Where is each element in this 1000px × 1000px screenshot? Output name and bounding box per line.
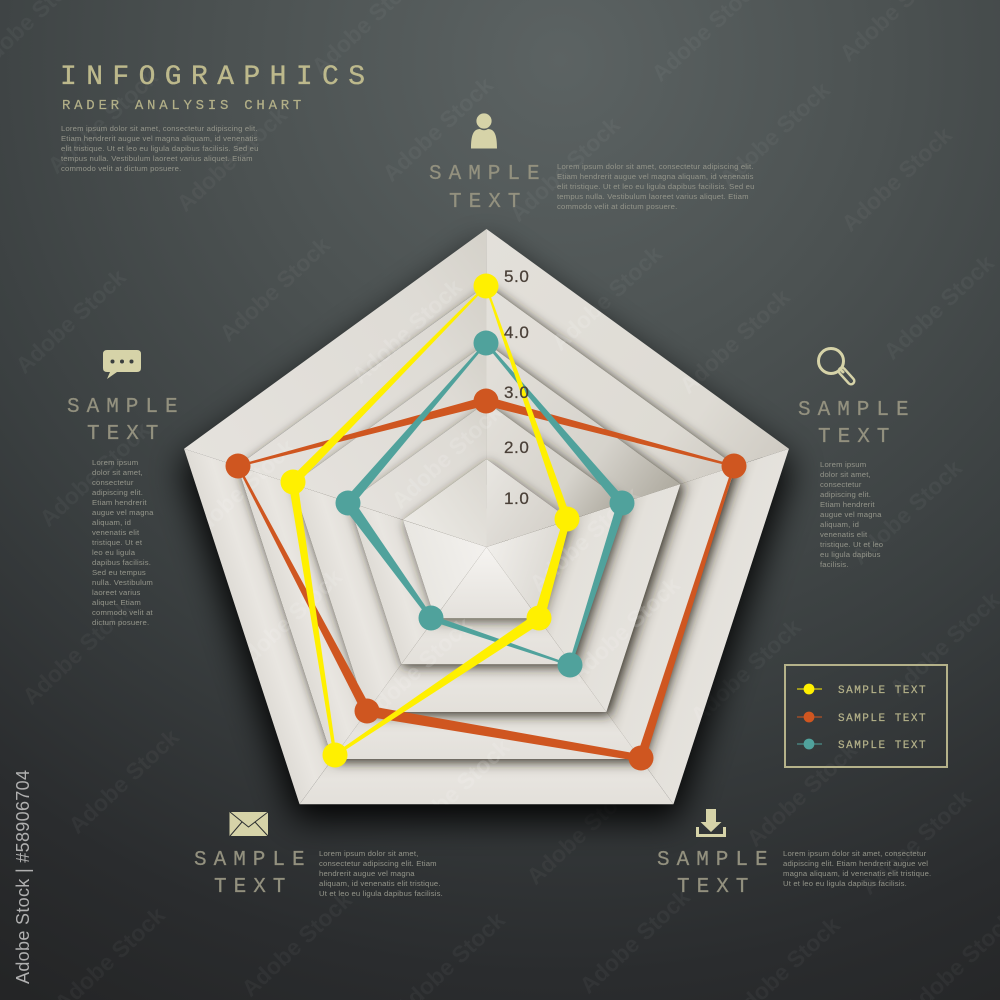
watermark on background: Adobe Stock [846, 455, 967, 570]
icon: download [696, 809, 726, 837]
top label [429, 163, 547, 214]
left text block: laoreet varius [92, 588, 141, 597]
left text block: aliquet. Etiam [92, 598, 141, 607]
watermark on paper: Adobe Stock [394, 734, 515, 849]
bottom left text block: aliquam, id venenatis elit tristique. [319, 879, 441, 888]
left text block: dolor sit amet, [92, 468, 143, 477]
legend row yellow: SAMPLE TEXT [838, 685, 927, 697]
left text block: dapibus facilisis. [92, 558, 151, 567]
right text block: augue vel magna [820, 510, 882, 519]
right text block: tristique. Ut et leo [820, 540, 883, 549]
bottom left label: TEXT [214, 876, 292, 899]
watermark on paper: Adobe Stock [674, 284, 795, 399]
left text block: aliquam, id [92, 518, 131, 527]
watermark on background: Adobe Stock [836, 122, 957, 237]
right text block: consectetur [820, 480, 862, 489]
ring 2 [349, 402, 627, 667]
intro text block: commodo velit at dictum posuere. [61, 164, 181, 173]
left text block: Lorem ipsum [92, 458, 138, 467]
watermark on paper: Adobe Stock [524, 482, 645, 597]
right label: TEXT [818, 426, 896, 449]
watermark on background: Adobe Stock [63, 724, 184, 839]
left label: SAMPLE [67, 396, 185, 419]
watermark on background: Adobe Stock [546, 241, 667, 356]
right text block: Etiam hendrerit [820, 500, 875, 509]
teal series [336, 330, 634, 678]
intro text block [61, 124, 259, 173]
legend row teal: SAMPLE TEXT [838, 740, 927, 752]
subtitle: RADER ANALYSIS CHART [62, 98, 305, 114]
legend row yellow [797, 684, 927, 697]
watermark on background: Adobe Stock [171, 102, 292, 217]
bottom right label [657, 849, 775, 899]
right text block: adipiscing elit. [820, 490, 871, 499]
bottom right label: SAMPLE [657, 849, 775, 872]
bottom left text block [319, 849, 443, 898]
watermark on background: Adobe Stock [214, 232, 335, 347]
top text block [557, 162, 755, 211]
intro text block: Lorem ipsum dolor sit amet, consectetur adipiscing elit. [61, 124, 258, 133]
bottom left text block: consectetur adipiscing elit. Etiam [319, 859, 437, 868]
left text block: leo eu ligula [92, 548, 136, 557]
watermark on background: Adobe Stock [42, 64, 163, 179]
left text block: Sed eu tempus [92, 568, 146, 577]
axis labels [504, 267, 529, 508]
watermark on background: Adobe Stock [574, 884, 695, 999]
right label: SAMPLE [798, 399, 916, 422]
right label [798, 399, 916, 449]
left text block: Etiam hendrerit [92, 498, 147, 507]
watermark on background: Adobe Stock [34, 417, 155, 532]
watermark on background: Adobe Stock [741, 737, 862, 852]
axis labels: 3.0 [504, 383, 529, 402]
watermark on paper: Adobe Stock [346, 274, 467, 389]
bottom right label: TEXT [677, 876, 755, 899]
icon: magnifier [818, 348, 851, 381]
top text block: Lorem ipsum dolor sit amet, consectetur adipiscing elit. [557, 162, 754, 171]
red series [226, 388, 746, 770]
right text block: eu ligula dapibus [820, 550, 881, 559]
watermark on paper: Adobe Stock [226, 564, 347, 679]
watermark on paper: Adobe Stock [685, 614, 806, 729]
top label: TEXT [449, 191, 527, 214]
stock id: Adobe Stock | #58906704 [13, 770, 33, 984]
watermark on paper: Adobe Stock [179, 434, 300, 549]
watermark on background: Adobe Stock [377, 72, 498, 187]
watermark on background: Adobe Stock [521, 775, 642, 890]
top text block: Etiam hendrerit augue vel magna aliquam, id venenatis [557, 172, 754, 181]
right text block: dolor sit amet, [820, 470, 871, 479]
bottom right text block: Ut et leo eu ligula dapibus facilisis. [783, 879, 907, 888]
ring 1 centre [403, 459, 572, 621]
left text block: dictum posuere. [92, 618, 149, 627]
watermark on background: Adobe Stock [17, 595, 138, 710]
watermark on paper: Adobe Stock [564, 572, 685, 687]
legend [785, 665, 947, 767]
intro text block: Etiam hendrerit augue vel magna aliquam, id venenatis [61, 134, 258, 143]
right text block [820, 460, 883, 569]
left text block [92, 458, 154, 627]
right text block: facilisis. [820, 560, 849, 569]
watermark on background: Adobe Stock [504, 112, 625, 227]
right text block: aliquam, id [820, 520, 859, 529]
ring 3 [293, 343, 684, 715]
bottom left label: SAMPLE [194, 849, 312, 872]
top label: SAMPLE [429, 163, 547, 186]
top text block: tempus nulla. Vestibulum laoreet varius aliquet. Etiam [557, 192, 749, 201]
watermark on background: Adobe Stock [855, 785, 976, 900]
radar chart [179, 229, 806, 849]
axis labels: 2.0 [504, 438, 529, 457]
left label [67, 396, 185, 446]
watermark on background: Adobe Stock [236, 887, 357, 1000]
bottom right text block: magna aliquam, id venenatis elit tristique. [783, 869, 931, 878]
icon: envelope [230, 812, 268, 836]
watermark on paper: Adobe Stock [214, 232, 335, 347]
axis labels: 1.0 [504, 489, 529, 508]
watermark on paper: Adobe Stock [356, 612, 477, 727]
bottom left text block: Ut et leo eu ligula dapibus facilisis. [319, 889, 443, 898]
intro text block: elit tristique. Ut et leo eu ligula dapibus facilisis. Sed eu [61, 144, 259, 153]
axis labels: 4.0 [504, 323, 529, 342]
watermark on paper: Adobe Stock [386, 399, 507, 514]
ring 4 [237, 285, 739, 762]
left text block: tristique. Ut et [92, 538, 143, 547]
right text block: venenatis elit [820, 530, 868, 539]
watermark on background: Adobe Stock [674, 284, 795, 399]
top text block: commodo velit at dictum posuere. [557, 202, 677, 211]
paper pentagon drop shadow [180, 245, 792, 820]
left text block: consectetur [92, 478, 134, 487]
axis labels: 5.0 [504, 267, 529, 286]
title: INFOGRAPHICS [60, 62, 374, 93]
left text block: venenatis elit [92, 528, 140, 537]
watermark on background: Adobe Stock [878, 250, 999, 365]
left text block: adipiscing elit. [92, 488, 143, 497]
left text block: commodo velit at [92, 608, 154, 617]
legend row red: SAMPLE TEXT [838, 713, 927, 725]
bottom left text block: Lorem ipsum dolor sit amet, [319, 849, 418, 858]
left label: TEXT [87, 423, 165, 446]
top text block: elit tristique. Ut et leo eu ligula dapibus facilisis. Sed eu [557, 182, 755, 191]
ring 5 [184, 229, 789, 804]
left text block: nulla. Vestibulum [92, 578, 153, 587]
bottom right text block: Lorem ipsum dolor sit amet, consectetur [783, 849, 927, 858]
legend row red [797, 712, 927, 725]
left text block: augue vel magna [92, 508, 154, 517]
watermark on background: Adobe Stock [685, 614, 806, 729]
intro text block: tempus nulla. Vestibulum laoreet varius aliquet. Etiam [61, 154, 253, 163]
icon: speech bubble [103, 350, 141, 379]
yellow series [280, 274, 580, 768]
legend row teal [797, 739, 927, 752]
watermark on paper [179, 232, 806, 849]
bottom right text block [783, 849, 931, 888]
bottom left label [194, 849, 312, 899]
right text block: Lorem ipsum [820, 460, 866, 469]
icon: person [471, 113, 497, 148]
bottom right text block: adipiscing elit. Etiam hendrerit augue vel [783, 859, 928, 868]
bottom left text block: hendrerit augue vel magna [319, 869, 415, 878]
watermark on background: Adobe Stock [10, 264, 131, 379]
watermark on background: Adobe Stock [714, 77, 835, 192]
watermark on paper: Adobe Stock [546, 241, 667, 356]
